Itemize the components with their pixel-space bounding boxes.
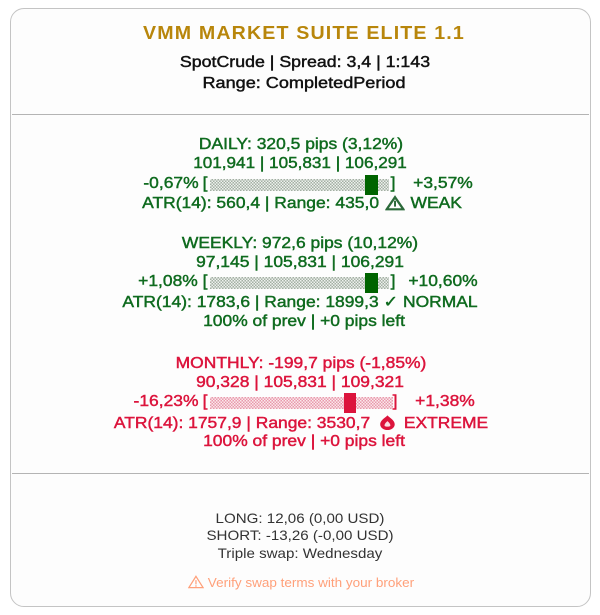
- monthly progress: 100% of prev | +0 pips left: [203, 433, 405, 450]
- symbol and spread: SpotCrude | Spread: 3,4 | 1:143: [180, 54, 430, 71]
- daily high percent: +3,57%: [413, 175, 473, 192]
- daily range bar: ]: [391, 175, 395, 192]
- monthly range bar: ]: [393, 393, 397, 410]
- monthly ATR line: ATR(14): 1757,9 | Range: 3530,7 EXTREME: [114, 415, 488, 432]
- daily low percent: -0,67%: [143, 175, 199, 192]
- panel: daily: [142, 136, 473, 212]
- daily ATR line: ATR(14): 560,4 | Range: 435,0 WEAK: [142, 195, 462, 212]
- weekly ATR line: ATR(14): 1783,6 | Range: 1899,3 ✓ NORMAL: [122, 294, 478, 311]
- daily range bar: [203, 175, 395, 195]
- weekly progress: 100% of prev | +0 pips left: [203, 313, 405, 330]
- panel: monthly: [114, 355, 488, 450]
- daily range bar: [: [203, 175, 207, 192]
- swap short: SHORT: -13,26 (-0,00 USD): [206, 527, 394, 543]
- monthly range bar: [: [203, 393, 207, 410]
- panel: weekly: [122, 235, 478, 330]
- weekly range bar: [: [203, 273, 207, 290]
- monthly prices: 90,328 | 105,831 | 109,321: [196, 374, 404, 391]
- range mode: Range: CompletedPeriod: [202, 75, 406, 92]
- monthly range bar: [203, 393, 397, 413]
- daily heading: DAILY: 320,5 pips (3,12%): [199, 136, 403, 153]
- weekly low percent: +1,08%: [138, 273, 198, 290]
- header: [143, 23, 465, 92]
- weekly range bar: ]: [391, 273, 395, 290]
- triple swap day: Triple swap: Wednesday: [218, 545, 382, 561]
- weekly heading: WEEKLY: 972,6 pips (10,12%): [182, 235, 418, 252]
- weekly prices: 97,145 | 105,831 | 106,291: [196, 254, 404, 271]
- swap long: LONG: 12,06 (0,00 USD): [216, 510, 384, 526]
- swap warning: Verify swap terms with your broker: [208, 576, 414, 590]
- weekly high percent: +10,60%: [408, 273, 478, 290]
- panel: swap: [188, 510, 414, 590]
- daily prices: 101,941 | 105,831 | 106,291: [193, 155, 407, 172]
- title: VMM MARKET SUITE ELITE 1.1: [143, 23, 465, 43]
- weekly range bar: [203, 273, 395, 293]
- monthly heading: MONTHLY: -199,7 pips (-1,85%): [176, 355, 426, 372]
- monthly high percent: +1,38%: [415, 393, 475, 410]
- monthly low percent: -16,23%: [134, 393, 198, 410]
